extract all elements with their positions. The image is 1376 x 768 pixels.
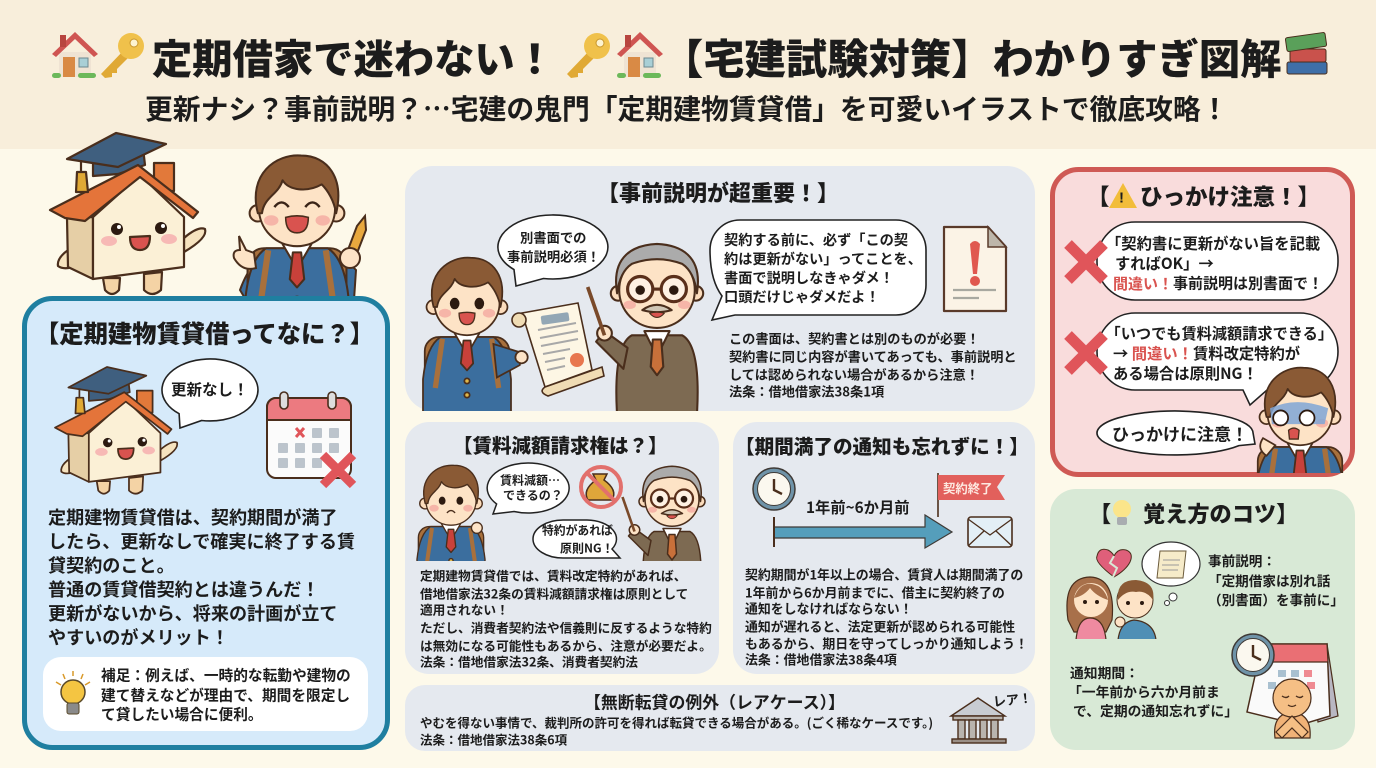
- speech bubble: teacher: [710, 220, 926, 320]
- body text: 普通の賃貸借契約とは違うんだ！: [48, 576, 319, 602]
- explanation text: 契約書に同じ内容が書いてあっても、事前説明と: [729, 346, 1017, 366]
- heading: 【定期建物賃貸借ってなに？】: [35, 314, 374, 350]
- heading: 【: [1089, 497, 1111, 529]
- icon: warning document: [944, 227, 1006, 311]
- explanation text: 通知が遅れると、法定更新が認められる可能性: [745, 616, 1015, 636]
- speech bubble: teacher: 約は更新がない」ってことを、: [724, 249, 922, 269]
- body text: 定期建物賃貸借は、契約期間が満了: [48, 504, 338, 530]
- arrow: notice period: [774, 515, 952, 548]
- panel: expiry notice: [733, 422, 1035, 674]
- icon: house emoji right: [617, 32, 663, 78]
- icon: cross 1: [1068, 244, 1104, 280]
- speech bubble: student: 別書面での: [520, 228, 586, 246]
- body text: やすいのがメリット！: [48, 624, 229, 650]
- explanation text: しては認められない場合があるから注意！: [729, 364, 979, 384]
- header band: [0, 0, 1376, 149]
- icon: books: [1285, 32, 1327, 74]
- icon: key emoji left: [101, 33, 144, 78]
- explanation text: 定期建物賃貸借では、賃料改定特約があれば、: [420, 566, 686, 584]
- speech bubble: teacher: 口頭だけじゃダメだよ！: [724, 287, 880, 307]
- explanation text: 法条：借地借家法38条1項: [729, 382, 885, 400]
- subtitle: 更新ナシ？事前説明？…宅建の鬼門「定期建物賃貸借」を可愛いイラストで徹底攻略！: [145, 88, 1229, 128]
- trap 1 balloon: 間違い！事前説明は別書面で！: [1113, 272, 1323, 294]
- trap 1 balloon: 「契約書に更新がない旨を記載: [1106, 232, 1320, 254]
- note box: 補足：例えば、一時的な転勤や建物の: [101, 664, 351, 686]
- icon: cross 2: [1068, 335, 1104, 371]
- tip text 1: 事前説明：: [1208, 550, 1276, 570]
- panel: prior explanation: [405, 166, 1035, 416]
- panel: subletting exception: [405, 685, 1035, 751]
- heading: [1087, 180, 1320, 212]
- explanation text: [420, 712, 933, 748]
- explanation text: [729, 328, 1017, 400]
- tip text 1: （別書面）を事前に」: [1208, 589, 1344, 609]
- trap 2 balloon: ある場合は原則NG！: [1113, 362, 1258, 384]
- tip text 2: 通知期間：: [1070, 662, 1139, 682]
- trap 2 balloon: → 間違い！賃料改定特約が: [1113, 342, 1300, 364]
- heading: 【賃料減額請求権は？】: [453, 430, 668, 458]
- speech bubble: can I reduce: [487, 463, 569, 514]
- mascot: happy student: [234, 155, 366, 341]
- body text: したら、更新なしで確実に終了する賃: [48, 528, 355, 554]
- icon: broken heart: [1097, 549, 1131, 577]
- note box: て貸したい場合に便利。: [101, 704, 263, 724]
- icon: warning triangle: !: [1119, 190, 1124, 206]
- tip text 1: 「定期借家は別れ話: [1208, 570, 1331, 590]
- explanation text: やむを得ない事情で、裁判所の許可を得れば転貸できる場合がある。(ごく稀なケースです。): [420, 712, 933, 732]
- rare label: レア！: [992, 687, 1033, 710]
- title: [52, 26, 1327, 86]
- explanation text: 法条：借地借家法32条、消費者契約法: [420, 652, 638, 670]
- icon: termination flag: 契約終了: [943, 479, 993, 497]
- panel: what is a fixed-term lease: [24, 298, 388, 748]
- icon: prohibited money bag: [581, 467, 621, 507]
- heading text: 覚え方のコツ】: [1143, 497, 1298, 529]
- panel: rent reduction: [405, 422, 719, 674]
- explanation text: 1年前から6か月前までに、借主に契約終了の: [745, 582, 1005, 602]
- icon: courthouse: [951, 698, 1006, 743]
- heading: 【無断転貸の例外（レアケース）】: [584, 688, 845, 714]
- icon: calendar with cross: [267, 392, 353, 485]
- speech bubble: no renewal: 更新なし！: [171, 378, 249, 400]
- title text second half: 【宅建試験対策】わかりすぎ図解: [662, 26, 1281, 86]
- body text: [48, 504, 355, 650]
- explanation text: 契約期間が1年以上の場合、賃貸人は期間満了の: [745, 564, 1023, 584]
- icon: contract scroll: [512, 303, 604, 396]
- speech bubble: no renewal: [162, 359, 258, 428]
- note box: 建て替えなどが理由で、期間を限定し: [101, 684, 350, 706]
- icon: termination flag: [938, 473, 1005, 517]
- speech bubble: student: [498, 215, 608, 286]
- speech bubble: teacher: 契約する前に、必ず「この契: [724, 230, 908, 250]
- explanation text: ただし、消費者契約法や信義則に反するような特約: [420, 618, 712, 636]
- panel: trap warning: [1050, 167, 1355, 477]
- explanation text: この書面は、契約書とは別のものが必要！: [729, 328, 980, 348]
- mascot: house with graduation cap: [50, 133, 205, 294]
- character: teacher: [588, 244, 703, 415]
- icon: house mascot small: [55, 367, 177, 494]
- timeline label: 1年前~6か月前: [806, 496, 910, 518]
- explanation text: [745, 564, 1028, 668]
- explanation text: もあるから、期日を守ってしっかり通知しよう！: [745, 634, 1028, 652]
- character: shocked student: [1256, 366, 1344, 473]
- speech bubble: not allowed with clause: 特約があれば: [542, 522, 613, 538]
- speech bubble: beware: [1097, 411, 1255, 455]
- speech bubble: not allowed with clause: 原則NG！: [560, 540, 614, 556]
- body text: 貸契約のこと。: [48, 552, 175, 578]
- title text first half: 定期借家で迷わない！: [152, 26, 555, 86]
- icon: house emoji left: [52, 32, 98, 78]
- speech bubble: can I reduce: できるの？: [503, 486, 563, 504]
- body text: 更新がないから、将来の計画が立て: [48, 600, 338, 626]
- icon: key emoji right: [567, 33, 610, 78]
- heading: 【: [1087, 180, 1110, 212]
- trap 1 balloon: すればOK」→: [1115, 252, 1214, 274]
- icon: envelope: [968, 517, 1012, 547]
- explanation text: 法条：借地借家法38条4項: [745, 650, 897, 668]
- icon: calendar, clock and praying person: [1232, 634, 1338, 738]
- character: teacher: [621, 466, 706, 561]
- explanation text: 通知をしなければならない！: [745, 598, 913, 618]
- character: worried student: [416, 464, 486, 561]
- explanation text: 適用されない！: [420, 600, 509, 618]
- tip text 2: で、定期の通知忘れずに」: [1073, 700, 1238, 720]
- heading: [1089, 497, 1298, 529]
- explanation text: [420, 566, 712, 670]
- icon: warning triangle: [1109, 183, 1137, 208]
- speech bubble: student: 事前説明必須！: [507, 246, 600, 266]
- tip text 2: [1068, 662, 1238, 720]
- explanation text: 法条：借地借家法38条6項: [420, 730, 568, 748]
- tip text 2: 「一年前から六か月前ま: [1068, 681, 1220, 701]
- icon: light bulb: [1113, 500, 1131, 525]
- icon: light bulb: [56, 671, 90, 714]
- character: student: [423, 258, 528, 416]
- icon: thought bubble with document: [1142, 542, 1200, 606]
- character: girl: [1067, 577, 1113, 640]
- tip text 1: [1208, 550, 1344, 609]
- icon: clock: [753, 468, 795, 510]
- explanation text: は無効になる可能性もあるから、注意が必要だよ。: [420, 636, 712, 654]
- trap 2 balloon: [1097, 313, 1338, 405]
- speech bubble: teacher: 書面で説明しなきゃダメ！: [724, 268, 894, 288]
- speech bubble: not allowed with clause: [533, 520, 620, 558]
- trap 2 balloon: 「いつでも賃料減額請求できる」: [1106, 322, 1333, 344]
- heading: 【事前説明が超重要！】: [597, 176, 839, 208]
- character: boy: [1115, 580, 1156, 640]
- speech bubble: can I reduce: 賃料減額…: [500, 472, 560, 488]
- panel: memory tips: [1050, 489, 1355, 750]
- heading text: ひっかけ注意！】: [1140, 180, 1320, 212]
- explanation text: 借地借家法32条の賃料減額請求権は原則として: [420, 584, 688, 602]
- speech bubble: beware: ひっかけに注意！: [1112, 420, 1248, 446]
- note box: [43, 657, 368, 731]
- heading: 【期間満了の通知も忘れずに！】: [735, 430, 1029, 460]
- trap 1 balloon: [1097, 222, 1338, 300]
